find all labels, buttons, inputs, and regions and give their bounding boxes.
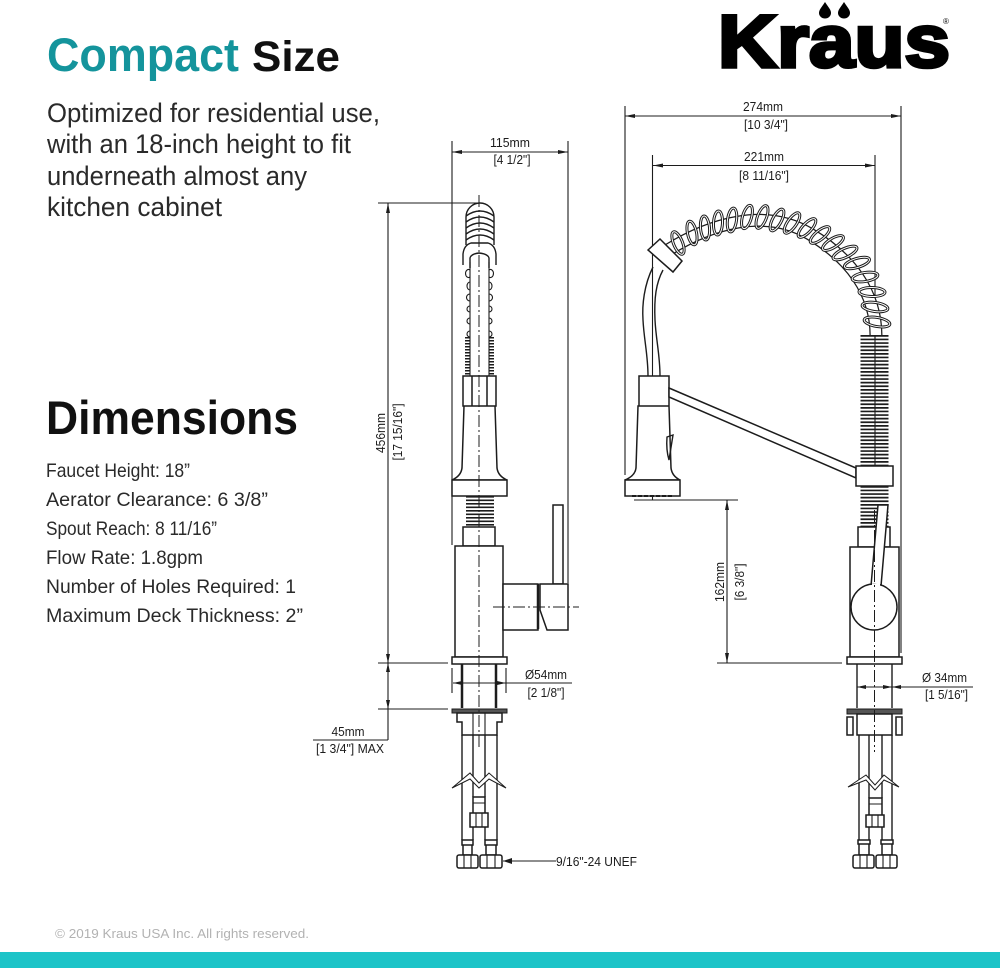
spray trigger — [667, 435, 673, 460]
icon: water drops — [819, 2, 850, 18]
dimensions list: Aerator Clearance: 6 3/8” — [46, 489, 268, 511]
heading: Dimensions: Dimensions — [46, 391, 298, 444]
heading: Compact Size: Size — [252, 33, 340, 81]
supply tubes — [848, 735, 899, 868]
side-view faucet drawing — [313, 135, 637, 869]
faucet body — [850, 547, 899, 657]
mounting shank: Ø 34mm — [922, 670, 967, 685]
intro text block: with an 18-inch height to fit — [46, 129, 351, 159]
dimension: 162mm clearance: [6 3/8"] — [732, 564, 747, 600]
curved spray neck — [643, 267, 663, 376]
dimension: 9/16 connector: 9/16"-24 UNEF — [556, 854, 637, 869]
hose arc — [668, 220, 876, 336]
spray head collar — [648, 239, 682, 272]
mounting plate, nuts and bolts — [847, 709, 902, 735]
spring coil arc — [669, 204, 891, 329]
heading: Compact Size — [47, 28, 340, 81]
mounting plate and nuts — [452, 709, 507, 735]
mounting shank: Ø54mm — [525, 667, 567, 682]
centre line and deck thickness label — [316, 195, 479, 756]
arm collar — [856, 466, 893, 486]
mounting shank — [452, 664, 572, 708]
mounting shank: [2 1/8"] — [528, 685, 564, 700]
dense lower coil — [860, 335, 889, 466]
dimension: 221mm reach — [652, 149, 875, 500]
intro text block — [46, 98, 380, 222]
faucet body — [455, 546, 503, 657]
centre line — [874, 510, 876, 752]
Kraus logo: Kraus — [718, 0, 950, 83]
dimensions list: Number of Holes Required: 1 — [46, 576, 296, 598]
spray nozzle — [632, 495, 672, 497]
dimension: 456mm height: [17 15/16"] — [390, 404, 405, 460]
dimension: 274mm width: [10 3/4"] — [744, 117, 788, 132]
heading: Compact Size: Compact — [47, 28, 239, 81]
dimension: 162mm clearance: 162mm — [712, 562, 727, 602]
dimension: 274mm width: 274mm — [743, 99, 783, 114]
dimension: 274mm width — [625, 99, 901, 653]
dimension: 456mm height — [313, 203, 478, 740]
front-view faucet drawing — [625, 99, 973, 868]
mounting shank: [1 5/16"] — [925, 687, 968, 702]
spray head body — [452, 376, 507, 480]
threaded lower hose — [858, 486, 890, 547]
spray base — [452, 480, 507, 496]
dimensions list — [46, 460, 303, 627]
centre line and deck thickness label: 45mm — [332, 724, 364, 739]
copyright note: © 2019 Kraus USA Inc. All rights reserved. — [55, 926, 309, 941]
intro text block: Optimized for residential use, — [47, 98, 380, 128]
dimension: 115mm width — [452, 135, 568, 583]
handle — [493, 505, 579, 630]
dimensions list: Spout Reach: 8 11/16” — [46, 518, 217, 540]
spray head body — [625, 376, 680, 480]
dimension: 162mm clearance — [634, 500, 842, 663]
dimension: 456mm height: 456mm — [373, 413, 388, 453]
base collar — [452, 657, 507, 664]
bottom teal bar — [0, 952, 1000, 968]
centre line and deck thickness label: [1 3/4"] MAX — [316, 741, 384, 756]
dimension: 115mm width: 115mm — [490, 135, 530, 150]
intro text block: kitchen cabinet — [47, 192, 222, 222]
dimensions list: Flow Rate: 1.8gpm — [46, 547, 203, 569]
spray base — [625, 480, 680, 496]
threaded hose — [463, 496, 495, 546]
Kraus logo: ® — [943, 17, 949, 26]
mounting shank — [857, 664, 973, 708]
dimensions list: Maximum Deck Thickness: 2” — [46, 605, 303, 627]
spring coil and hose — [466, 262, 493, 376]
dimension: 221mm reach: 221mm — [744, 149, 784, 164]
spray head coil top — [463, 203, 496, 268]
dimension: 9/16 connector — [503, 854, 637, 869]
intro text block: underneath almost any — [47, 161, 307, 191]
dimension: 115mm width: [4 1/2"] — [494, 152, 530, 167]
dimension: 221mm reach: [8 11/16"] — [739, 168, 789, 183]
supply tubes — [452, 735, 506, 868]
dimensions list: Faucet Height: 18” — [46, 460, 190, 482]
lever handle and dial — [851, 505, 897, 630]
base collar — [847, 657, 902, 664]
support arm — [669, 388, 856, 478]
